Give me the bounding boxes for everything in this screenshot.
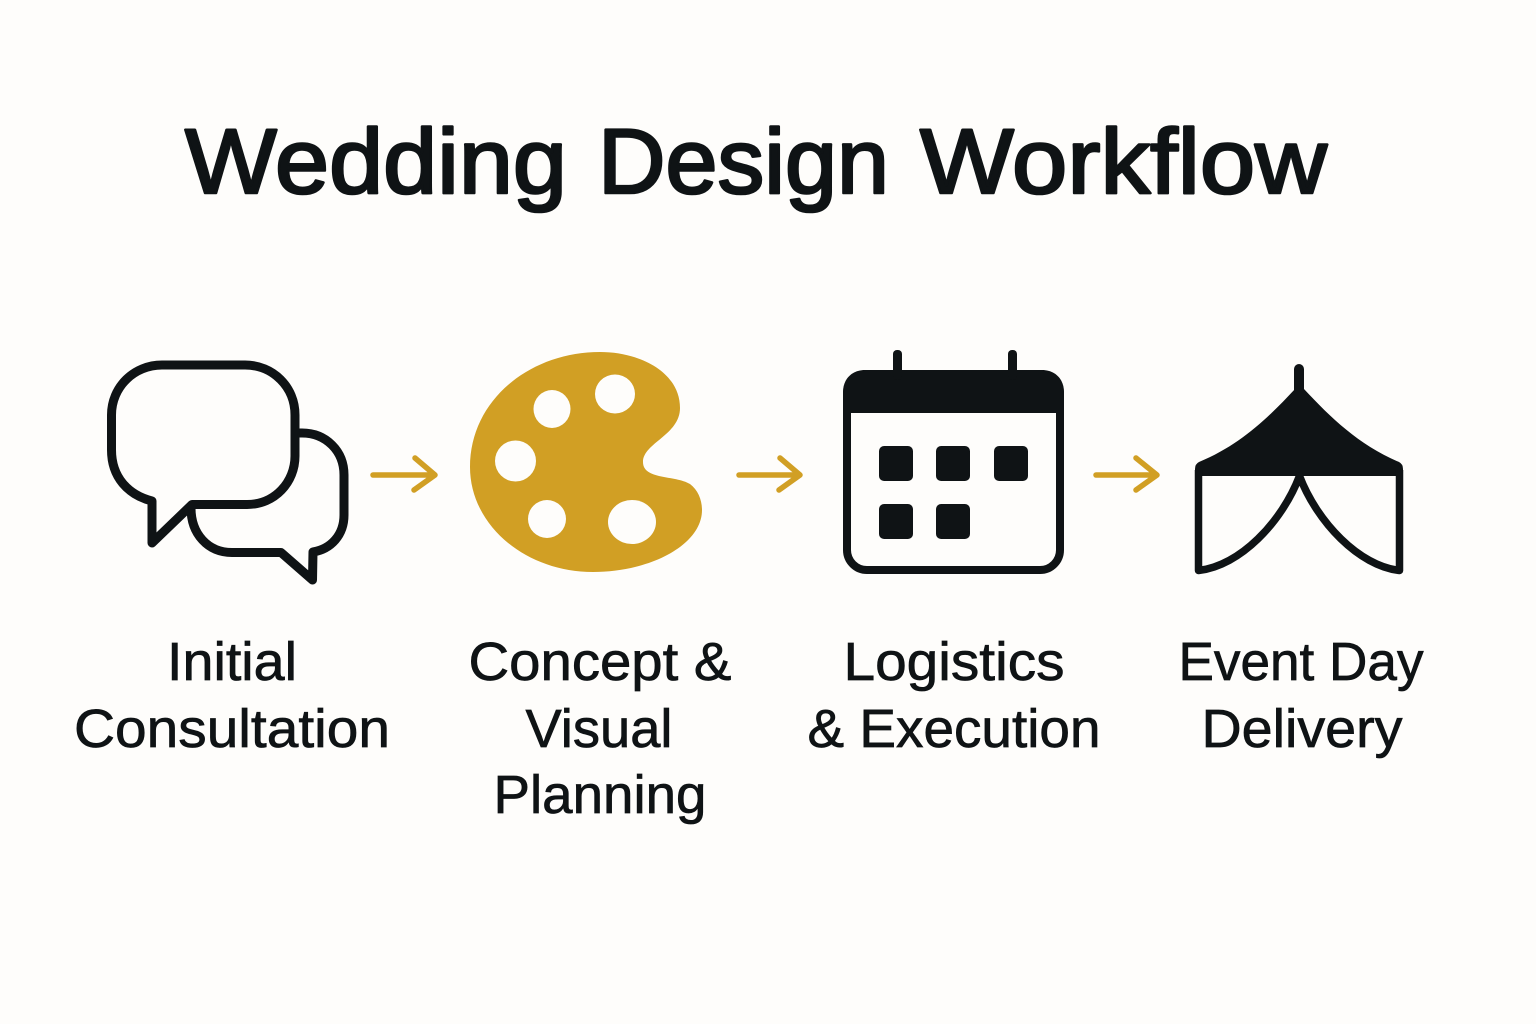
arrow 3 (1096, 458, 1157, 490)
title: Workflow (920, 111, 1328, 213)
label: Logistics & Execution: Logistics (844, 632, 1064, 692)
label: Logistics & Execution: & Execution (808, 699, 1100, 759)
label: Initial Consultation: Consultation (74, 699, 390, 759)
arrow 1 (373, 458, 435, 490)
label: Initial Consultation (74, 632, 390, 759)
label: Event Day Delivery (1178, 632, 1424, 759)
title: Wedding (185, 111, 567, 213)
label: Concept & Visual Planning: Visual (526, 699, 672, 759)
title (185, 111, 1328, 213)
icon: calendar (843, 350, 1064, 570)
label: Event Day Delivery: Event Day (1178, 632, 1424, 692)
label: Initial Consultation: Initial (167, 632, 297, 692)
label: Concept & Visual Planning: Concept & (468, 632, 732, 692)
title: Design (598, 111, 889, 213)
label: Event Day Delivery: Delivery (1202, 699, 1402, 759)
icon: tent (1195, 364, 1403, 570)
icon: speech bubbles (112, 365, 344, 580)
arrow 2 (739, 458, 800, 490)
label: Concept & Visual Planning (468, 632, 732, 825)
label: Logistics & Execution (808, 632, 1100, 759)
icon: palette (470, 352, 702, 572)
label: Concept & Visual Planning: Planning (494, 765, 706, 825)
